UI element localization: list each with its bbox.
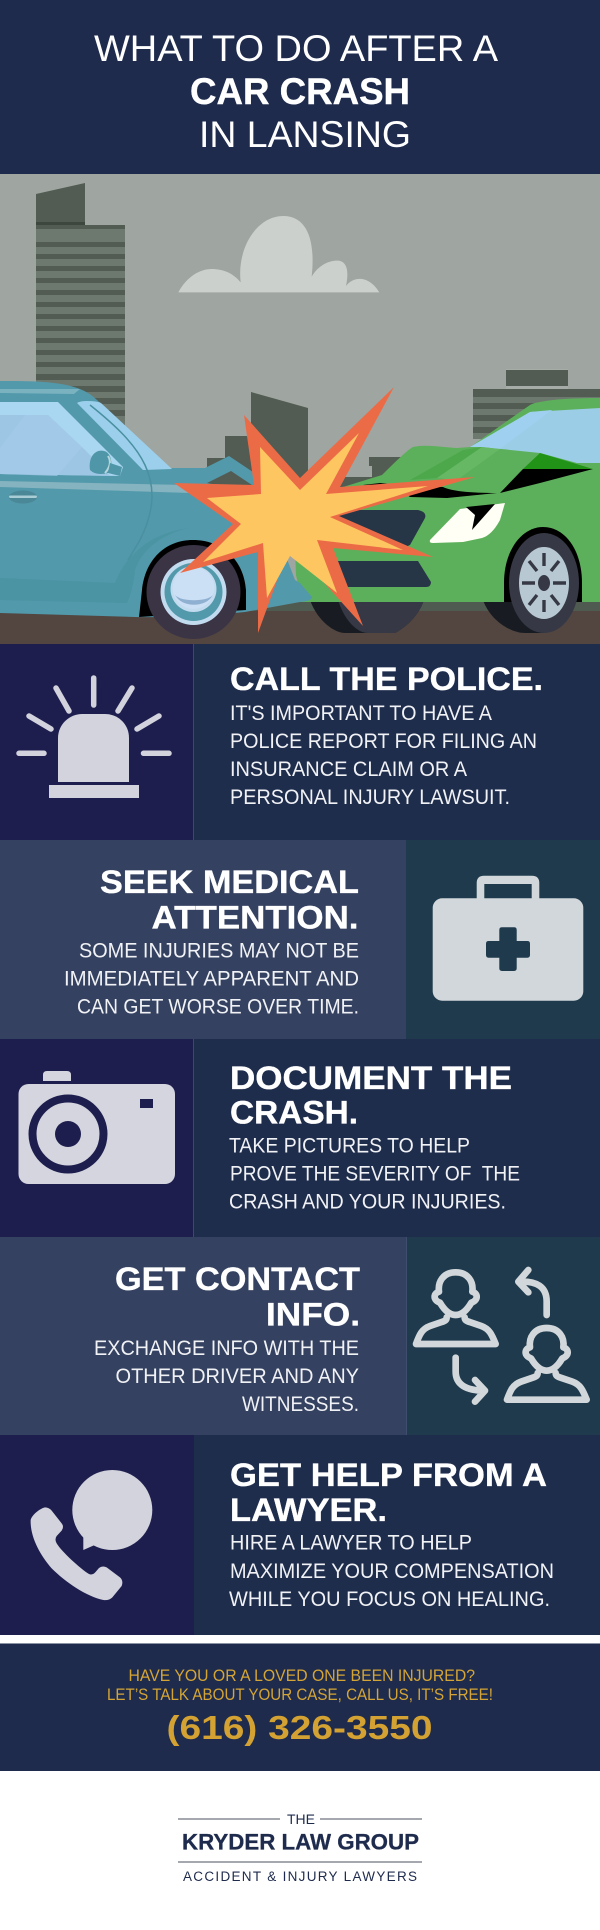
- body text: HIRE A LAWYER TO HELP: [230, 1532, 472, 1554]
- heading: GET CONTACT: [115, 1261, 360, 1297]
- icon: two people exchanging: [416, 1270, 587, 1402]
- right buildings: [473, 369, 600, 439]
- logo: the kryder law group: [178, 1811, 422, 1884]
- heading: ATTENTION.: [152, 900, 358, 936]
- icon: camera: [18, 1071, 175, 1184]
- title banner: [0, 0, 600, 174]
- blue car: [0, 381, 312, 639]
- body text: [229, 1134, 520, 1214]
- step 3: document the crash: [0, 1039, 600, 1237]
- road: [0, 602, 600, 644]
- body text: TAKE PICTURES TO HELP: [229, 1134, 470, 1158]
- body text: PROVE THE SEVERITY OF THE: [230, 1162, 520, 1186]
- body text: CAN GET WORSE OVER TIME.: [77, 996, 359, 1018]
- title banner: WHAT TO DO AFTER A: [94, 28, 498, 69]
- heading: GET HELP FROM A: [230, 1457, 547, 1493]
- logo: the kryder law group: KRYDER LAW GROUP: [182, 1830, 419, 1854]
- icon: siren: [19, 678, 169, 798]
- logo: the kryder law group: THE: [287, 1811, 315, 1827]
- call to action banner: [0, 1643, 600, 1771]
- body text: [64, 940, 359, 1018]
- body text: SOME INJURIES MAY NOT BE: [79, 940, 359, 962]
- body text: [230, 702, 537, 809]
- heading: DOCUMENT THE: [230, 1060, 512, 1096]
- heading: CRASH.: [230, 1094, 358, 1130]
- icon: first aid kit: [433, 876, 583, 1001]
- icon: phone and speech bubble: [31, 1470, 152, 1600]
- body text: IMMEDIATELY APPARENT AND: [64, 968, 359, 990]
- body text: MAXIMIZE YOUR COMPENSATION: [230, 1560, 554, 1583]
- body text: [94, 1337, 359, 1416]
- logo: the kryder law group: ACCIDENT & INJURY LAWYERS: [183, 1869, 417, 1884]
- step 2: seek medical attention: [0, 840, 600, 1039]
- body text: POLICE REPORT FOR FILING AN: [230, 730, 537, 753]
- crash illustration: [0, 174, 600, 644]
- call to action banner: HAVE YOU OR A LOVED ONE BEEN INJURED?: [128, 1667, 475, 1685]
- body text: WITNESSES.: [242, 1393, 359, 1416]
- body text: PERSONAL INJURY LAWSUIT.: [230, 786, 510, 809]
- heading: LAWYER.: [230, 1492, 387, 1528]
- central buildings: [207, 392, 403, 500]
- body text: INSURANCE CLAIM OR A: [230, 758, 467, 781]
- heading: INFO.: [266, 1296, 360, 1332]
- call to action banner: (616) 326-3550: [166, 1709, 432, 1746]
- heading: [230, 1060, 512, 1130]
- body text: [229, 1532, 554, 1611]
- heading: CALL THE POLICE.: [230, 661, 543, 697]
- heading: [115, 1261, 360, 1332]
- title banner: IN LANSING: [199, 114, 411, 155]
- green car: [295, 398, 600, 633]
- left skyscraper: [36, 183, 125, 425]
- body text: WHILE YOU FOCUS ON HEALING.: [229, 1588, 550, 1611]
- title banner: CAR CRASH: [190, 71, 410, 112]
- heading: SEEK MEDICAL: [100, 864, 359, 900]
- step 1: call the police: [0, 644, 600, 840]
- body text: OTHER DRIVER AND ANY: [116, 1365, 359, 1388]
- explosion burst: [174, 387, 475, 633]
- step 5: get help from a lawyer: [0, 1435, 600, 1635]
- heading: [230, 1457, 547, 1528]
- heading: [100, 864, 359, 936]
- cloud: [178, 216, 379, 292]
- step 4: get contact info: [0, 1237, 600, 1435]
- body text: CRASH AND YOUR INJURIES.: [229, 1190, 506, 1214]
- body text: IT'S IMPORTANT TO HAVE A: [230, 702, 492, 725]
- call to action banner: LET’S TALK ABOUT YOUR CASE, CALL US, IT’S FREE!: [107, 1686, 493, 1704]
- body text: EXCHANGE INFO WITH THE: [94, 1337, 359, 1360]
